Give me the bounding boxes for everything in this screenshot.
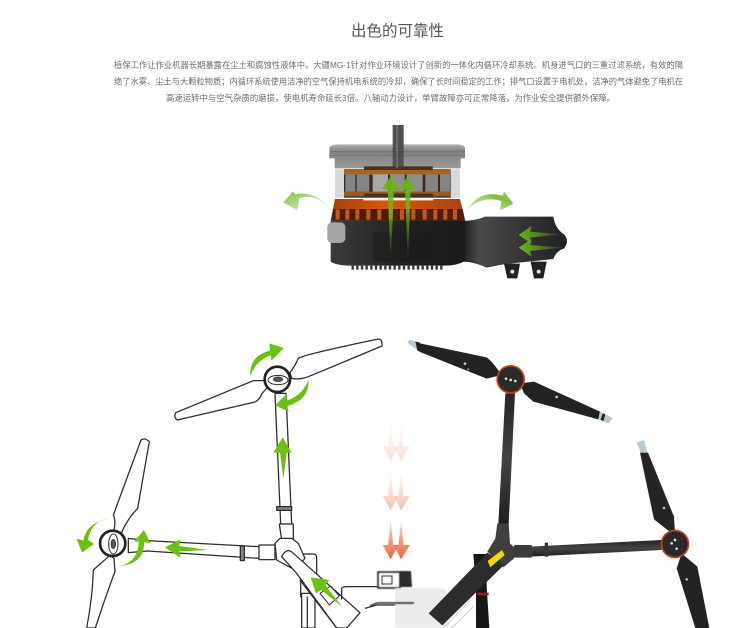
arm: vertical [498,393,515,524]
knob [327,222,345,243]
blade: right up [637,440,675,533]
orange heat sink [331,199,465,220]
blade: right down [677,553,709,628]
stator and coils [335,166,460,198]
arm cables [445,600,473,628]
arm joint [514,545,532,558]
arm clamp left [240,546,244,561]
arm clamp [277,507,292,510]
arm clamp [545,543,548,557]
text block: description [114,60,683,103]
landing leg [473,554,489,628]
hub: top [265,367,290,392]
arrow: main arm [311,577,342,607]
arm joint left [259,545,275,560]
arrow: rotation top 2 [275,380,309,412]
arrows: strong [383,522,410,559]
motor bell [329,144,465,168]
arrows: air intake [519,226,563,257]
blade: top right [520,382,613,423]
hub: right [661,530,689,558]
blade: top left [175,381,267,420]
arrow: rotation left 1 [77,518,109,553]
drone outline: left half [87,339,407,628]
blade: top right [290,339,382,379]
arrows: airflow up [382,177,417,262]
body lines [300,580,407,628]
fuel tank [395,588,449,628]
centre joint [275,538,305,570]
arrow: arm left [165,539,208,558]
motor diagram [283,125,567,278]
arrow: rotation top 1 [250,343,284,376]
heat arrows [383,423,410,559]
arrows: faint [383,423,410,461]
motor base [331,220,465,270]
arm: vertical [275,393,292,524]
blade: left up [113,439,149,533]
arrow: arm up [273,437,292,479]
body frame [301,554,317,597]
text block: description: 高速运转中与空气杂质的磨损，使电机寿命延长3倍。八轴动力设计，单臂故障亦可正常降落，为作业安全提供额外保障。 [166,93,615,103]
centre box [378,571,412,588]
arm: horizontal [128,538,259,558]
blade: top left [407,340,502,379]
landing leg [302,593,315,628]
motor arm [463,217,567,268]
arm: horizontal [530,540,662,557]
arm joint [279,524,293,540]
text block: description: 绝了水雾、尘土与大颗粒物质；内循环系统使用洁净的空气保持机电系统的冷却，确保了长时间稳定的工作；排气口设置于电机处，洁净的气体避免了电机在 [114,76,683,86]
centre joint [487,523,515,567]
motor shaft [393,125,404,169]
arrows: medium [383,473,410,510]
text block: description: 植保工作让作业机器长期暴露在尘土和腐蚀性液体中。大疆MG-1针对作业环境设计了创新的一体化内循环冷却系统。机身进气口的三重过滤系统，有效的隔 [114,60,683,70]
blade: left down [87,555,115,628]
arrow: exhaust left [283,192,330,210]
green airflow arrows [77,343,342,607]
main arm [429,553,504,625]
hub: left [100,531,125,556]
warning label [488,550,505,567]
arrow: exhaust right [466,192,513,211]
arm detail [320,586,339,605]
arrow: rotation left 2 [120,530,151,566]
hub: top [496,365,525,394]
main arm [282,551,360,628]
mounting tabs [504,262,547,278]
drone render: right half [407,340,709,628]
title: 出色的可靠性 [351,22,444,40]
tank edge line [370,603,414,606]
